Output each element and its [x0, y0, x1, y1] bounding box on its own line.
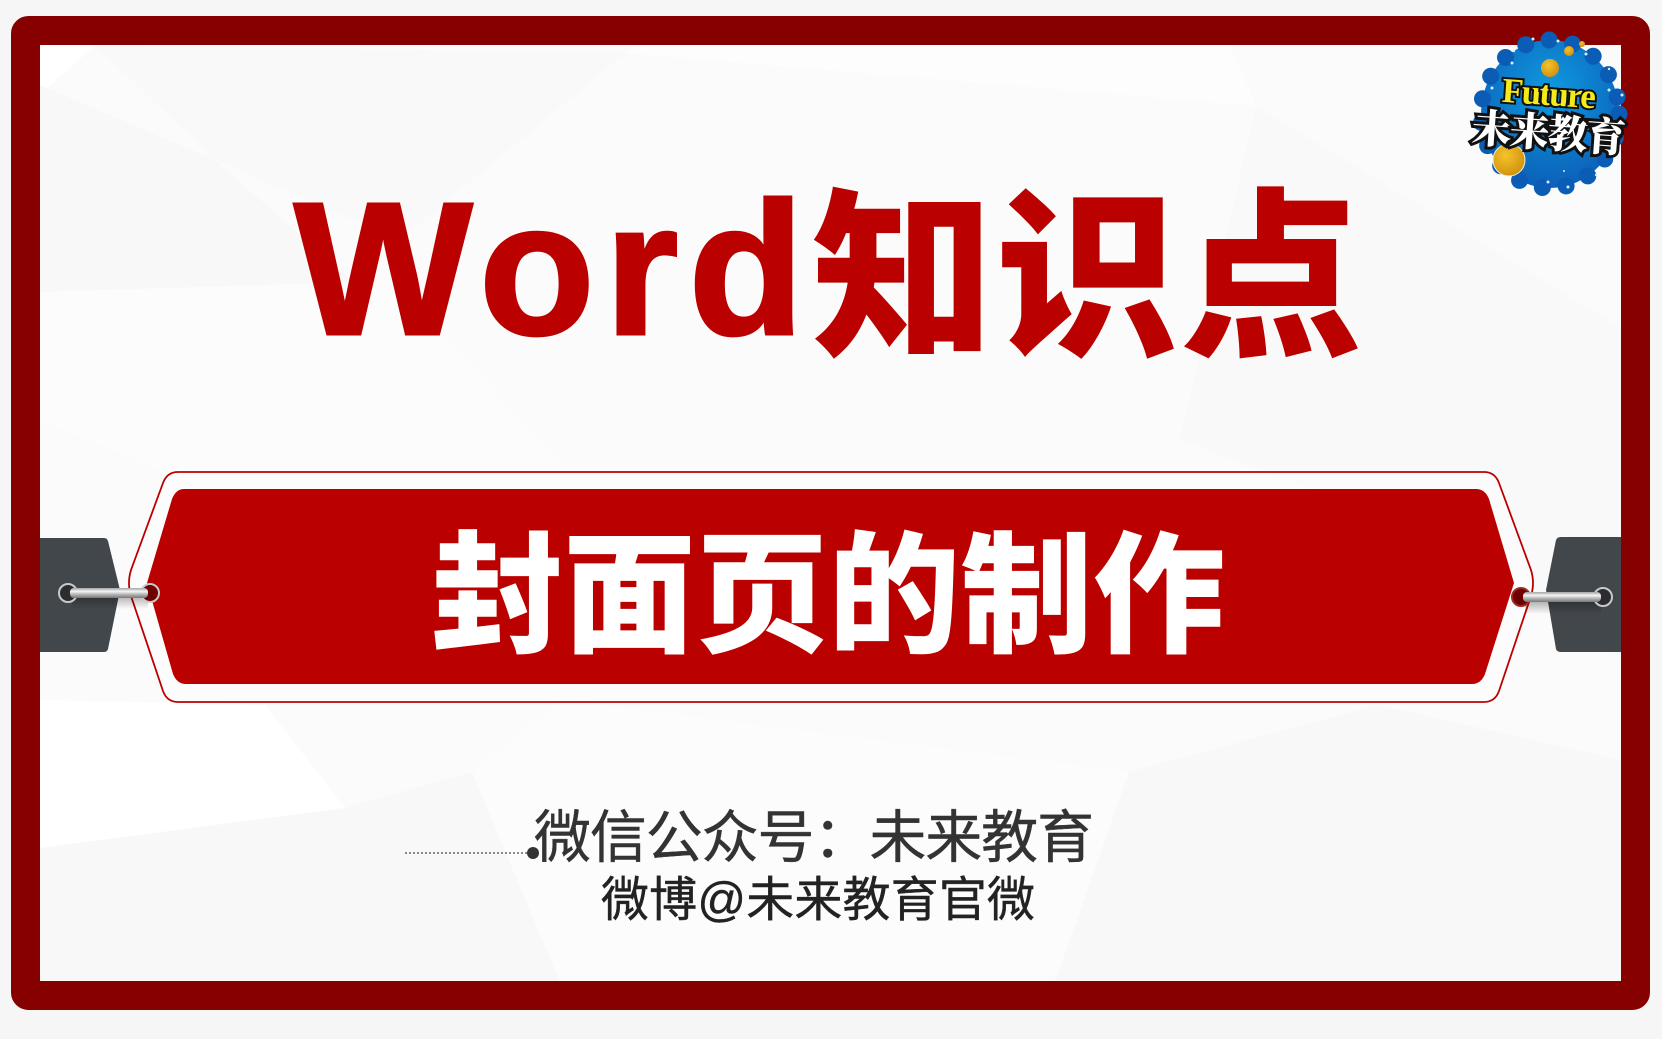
left ring binder: [59, 584, 159, 609]
weibo line: 微博@未来教育官微: [601, 874, 1035, 927]
right ring binder: [1512, 588, 1612, 614]
Future text: Future: [1501, 71, 1597, 116]
scalloped blue badge: [1481, 40, 1619, 188]
logo cjk text: 未来教育: [1470, 97, 1628, 164]
main title: 知识点: [812, 177, 1362, 381]
dotted leader with dot: [405, 847, 539, 859]
main title: [294, 164, 1362, 381]
left hanging tab: [40, 538, 120, 652]
banner subtitle: 封面页的制作: [431, 490, 1225, 681]
right hanging tab: [1546, 537, 1621, 652]
red banner: [147, 489, 1514, 684]
wechat line: 微信公众号：未来教育: [534, 806, 1094, 870]
red banner outline: [129, 472, 1533, 702]
planets and stars: [1490, 38, 1624, 188]
main title: Word: [294, 164, 804, 375]
logo badge: [1470, 38, 1628, 188]
